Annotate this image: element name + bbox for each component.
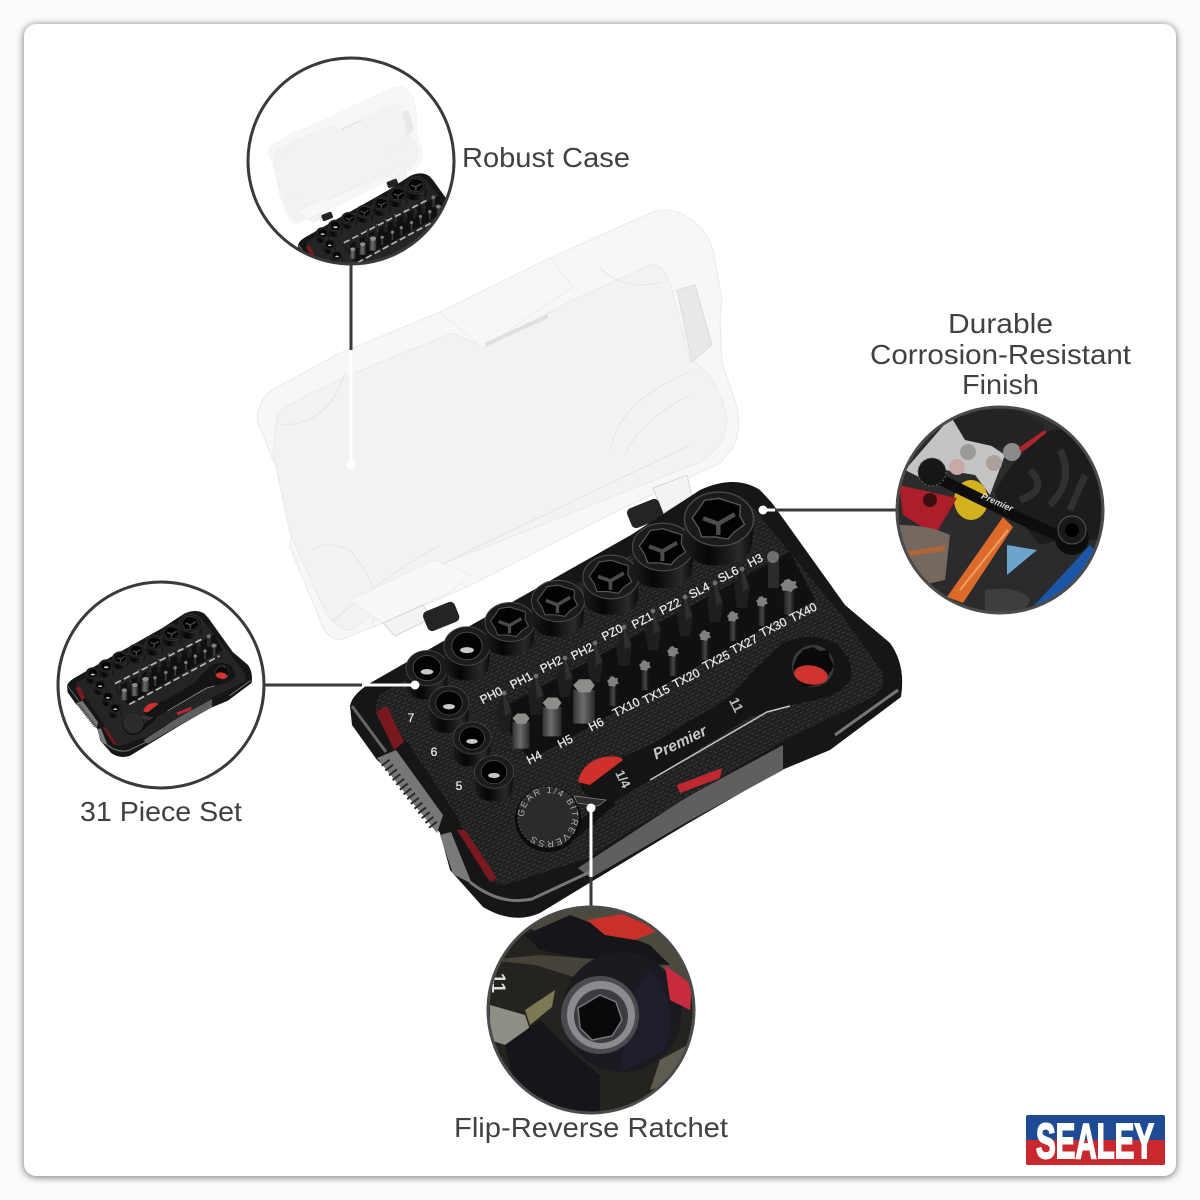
leader line: durable finish — [758, 506, 897, 514]
tray labels: H3 — [745, 551, 765, 570]
tray labels: PZ2 — [657, 595, 683, 618]
socket and bit tray — [350, 482, 902, 918]
tray labels: PZ0 — [599, 621, 625, 644]
sockets — [406, 492, 754, 801]
tray labels: TX20 — [670, 666, 702, 691]
tray labels: H4 — [524, 748, 544, 767]
label: durable corrosion-resistant finish: Corrosion-Resistant — [870, 339, 1131, 370]
tray labels: SL6 — [715, 563, 741, 586]
callout photo: flip-reverse ratchet: 11 — [487, 973, 508, 993]
ratchet markings: Premier — [650, 722, 711, 763]
leader line: robust case — [346, 262, 356, 470]
tray labels: H6 — [586, 715, 606, 734]
label: durable corrosion-resistant finish — [870, 308, 1131, 400]
tray labels: 5 — [456, 779, 463, 793]
label: durable corrosion-resistant finish: Finish — [962, 369, 1039, 400]
ratchet markings: 1/4 — [612, 768, 634, 791]
label: flip-reverse ratchet: Flip-Reverse Ratchet — [454, 1112, 728, 1143]
lower bits — [512, 579, 798, 749]
ratchet markings: 11 — [726, 695, 747, 715]
upper bits — [496, 551, 779, 732]
bit trench — [495, 552, 815, 760]
label: durable corrosion-resistant finish: Durable — [948, 308, 1053, 339]
tray labels: TX40 — [787, 600, 819, 625]
tray labels — [408, 551, 819, 793]
callout photo: durable corrosion-resistant finish: Premier — [980, 491, 1015, 514]
callout photo: flip-reverse ratchet — [485, 905, 697, 1117]
tray labels: PZ1 — [629, 609, 655, 632]
tray labels: 6 — [431, 745, 438, 759]
tray labels: TX15 — [640, 682, 672, 707]
tray labels: PH2 — [538, 653, 565, 676]
callout circle: robust case — [246, 56, 456, 266]
ratchet markings: GEAR 1/4 BITREVERSS — [518, 786, 578, 848]
tray labels: TX27 — [728, 632, 760, 657]
callout photo: durable corrosion-resistant finish — [895, 405, 1105, 620]
transparent case lid — [257, 210, 739, 640]
tray labels: PH1 — [508, 669, 535, 692]
tray labels: PH0 — [478, 684, 505, 707]
tray labels: H5 — [555, 732, 575, 751]
tray labels: PH2 — [569, 640, 596, 663]
leader line: 31 piece set — [264, 680, 420, 690]
tray gray band — [578, 745, 783, 878]
callout circle: 31 piece set — [58, 582, 264, 788]
label: robust case: Robust Case — [462, 142, 630, 173]
tray labels: TX10 — [610, 695, 642, 720]
tray outer shell — [350, 482, 902, 918]
tray labels: TX30 — [757, 615, 789, 640]
tray labels: 7 — [408, 711, 415, 725]
leader line: flip-reverse ratchet — [586, 804, 596, 908]
ratchet wrench — [515, 637, 852, 852]
tray carbon panel — [376, 502, 884, 885]
label: 31 piece set: 31 Piece Set — [80, 796, 242, 827]
tray labels: SL4 — [686, 579, 712, 602]
ratchet markings — [518, 695, 747, 848]
tray labels: TX25 — [700, 648, 732, 673]
